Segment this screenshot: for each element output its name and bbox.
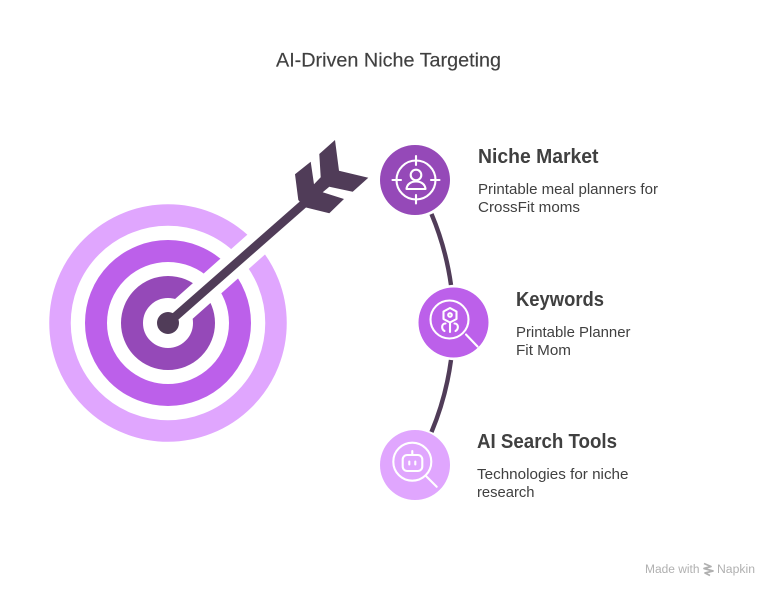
- inner ring: [132, 287, 204, 359]
- text block: AI search tools: Technologies for niche: [477, 467, 628, 483]
- watermark: Made with: [645, 564, 700, 576]
- text block: niche market: Printable meal planners for: [478, 182, 658, 198]
- bullseye: [157, 312, 179, 334]
- text block: AI search tools: research: [477, 485, 534, 501]
- outer ring: [60, 215, 276, 431]
- text block: keywords: Keywords: [516, 289, 604, 311]
- text block: niche market: Niche Market: [478, 146, 599, 168]
- text block: keywords: [516, 289, 631, 359]
- middle ring: [96, 251, 240, 395]
- icon: napkin logo: [704, 564, 713, 576]
- text block: niche market: CrossFit moms: [478, 200, 580, 216]
- curved connector: bottom: [432, 360, 451, 432]
- text block: AI search tools: AI Search Tools: [477, 431, 617, 453]
- arrow shaft: [168, 200, 308, 323]
- watermark: [645, 564, 755, 576]
- icon: claw magnifier: [430, 300, 478, 346]
- text block: AI search tools: [477, 431, 628, 501]
- title: AI-Driven Niche Targeting: [276, 50, 501, 72]
- arrow fletching: [295, 140, 368, 213]
- node: niche market: [380, 145, 450, 215]
- target with arrow: [60, 140, 368, 431]
- node: AI search tools: [380, 430, 450, 500]
- node: keywords: [418, 288, 488, 358]
- watermark: Napkin: [717, 564, 755, 576]
- icon: target person: [392, 156, 440, 204]
- text block: keywords: Printable Planner: [516, 325, 631, 341]
- text block: niche market: [478, 146, 658, 216]
- curved connector: top: [432, 214, 451, 285]
- text block: keywords: Fit Mom: [516, 343, 571, 359]
- icon: robot magnifier: [393, 443, 437, 487]
